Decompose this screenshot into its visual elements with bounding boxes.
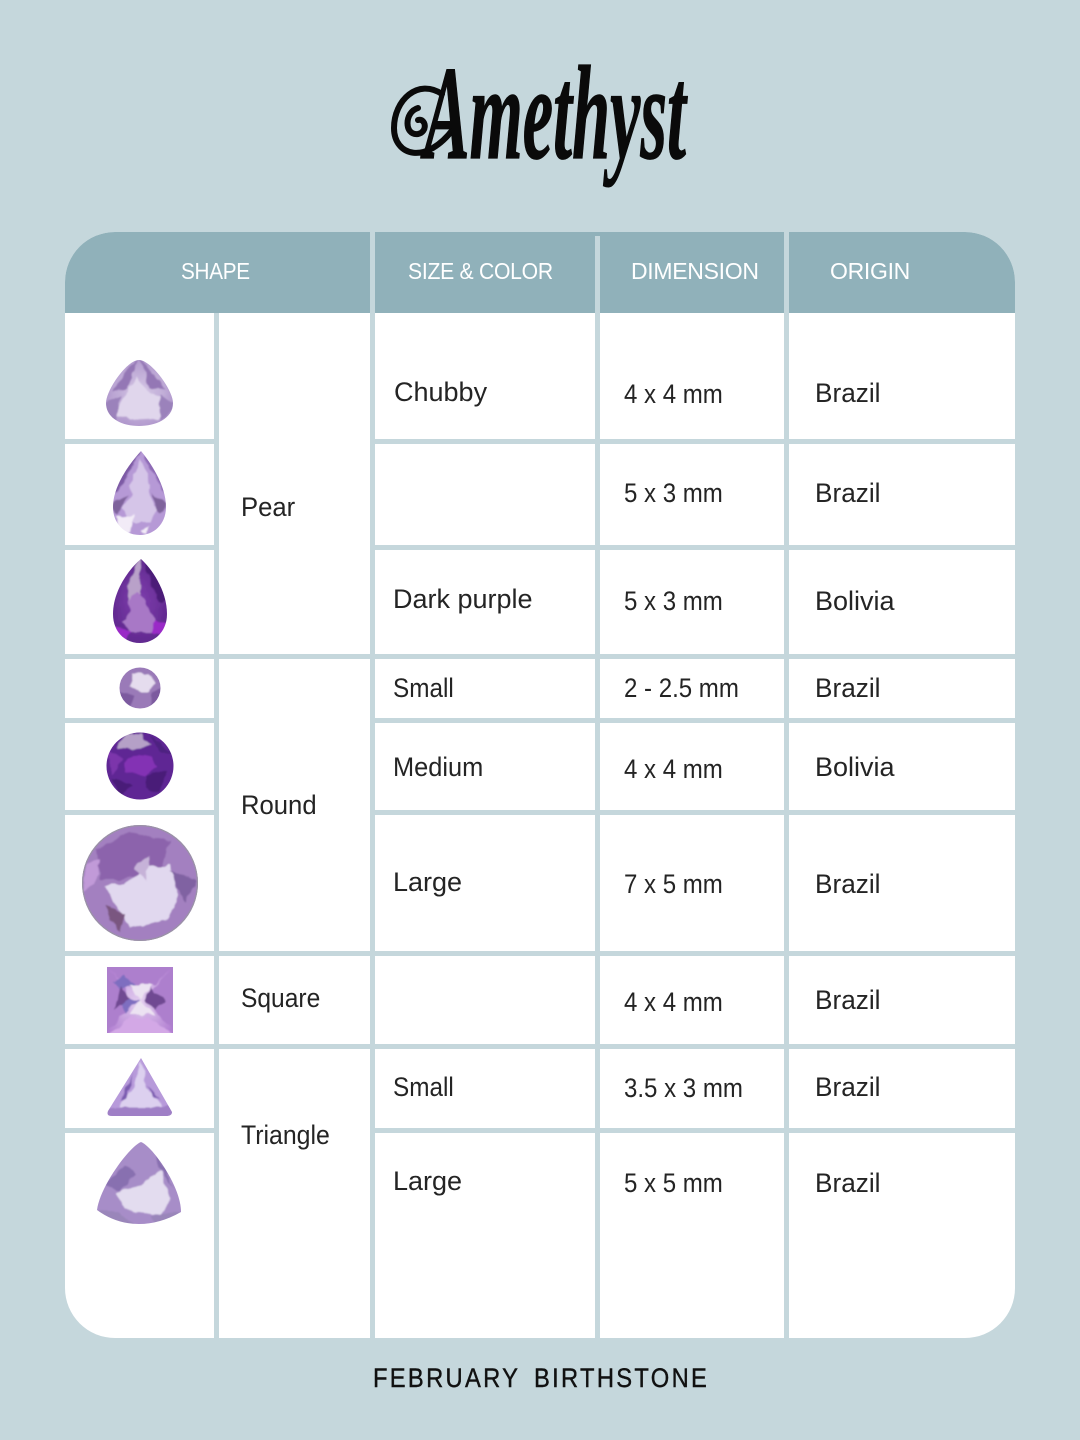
gem: dark purple pear xyxy=(113,559,167,643)
table header band xyxy=(65,232,1015,313)
shape label: pear: Pear xyxy=(241,492,295,522)
origin: row 9: Brazil xyxy=(815,1168,880,1198)
origin: row 1: Brazil xyxy=(815,378,880,408)
dimension: row 5: 4 x 4 mm xyxy=(624,754,723,784)
dimension: row 7: 4 x 4 mm xyxy=(624,987,723,1017)
origin: row 3: Bolivia xyxy=(815,586,895,616)
size: large round: Large xyxy=(393,867,462,897)
table xyxy=(65,232,1015,1338)
gem: square cut xyxy=(107,967,173,1033)
gem: large trilliant xyxy=(97,1142,181,1224)
size: small triangle: Small xyxy=(393,1072,454,1102)
dimension: row 6: 7 x 5 mm xyxy=(624,869,723,899)
header: shape: SHAPE xyxy=(181,258,250,284)
gem: small triangle xyxy=(108,1058,172,1116)
origin: row 8: Brazil xyxy=(815,1072,880,1102)
header: size and color: SIZE & COLOR xyxy=(408,258,553,284)
size: large triangle: Large xyxy=(393,1166,462,1196)
dimension: row 4: 2 - 2.5 mm xyxy=(624,673,739,703)
dimension: row 8: 3.5 x 3 mm xyxy=(624,1073,743,1103)
size: dark purple: Dark purple xyxy=(393,584,533,614)
gem: medium round xyxy=(106,732,174,800)
origin: row 4: Brazil xyxy=(815,673,880,703)
header: dimension: DIMENSION xyxy=(631,258,759,284)
gem: slim pear xyxy=(113,451,166,535)
dimension: row 3: 5 x 3 mm xyxy=(624,586,723,616)
gem: small round xyxy=(120,668,160,708)
dimension: row 1: 4 x 4 mm xyxy=(624,379,723,409)
origin: row 7: Brazil xyxy=(815,985,880,1015)
origin: row 2: Brazil xyxy=(815,478,880,508)
table card background xyxy=(65,232,1015,1338)
gemstone images xyxy=(82,360,198,1224)
origin: row 6: Brazil xyxy=(815,869,880,899)
footer: february birthstone: FEBRUARY BIRTHSTONE xyxy=(373,1363,709,1393)
shape label: triangle: Triangle xyxy=(241,1120,330,1150)
size: small round: Small xyxy=(393,673,454,703)
shape label: square: Square xyxy=(241,983,320,1013)
size: chubby: Chubby xyxy=(394,377,487,407)
shape label: round: Round xyxy=(241,790,317,820)
dimension: row 2: 5 x 3 mm xyxy=(624,478,723,508)
gem: large round xyxy=(82,825,198,941)
origin: row 5: Bolivia xyxy=(815,752,895,782)
size: medium round: Medium xyxy=(393,752,483,782)
dimension: row 9: 5 x 5 mm xyxy=(624,1168,723,1198)
header: origin: ORIGIN xyxy=(830,258,910,284)
gem: chubby pear xyxy=(106,360,173,426)
